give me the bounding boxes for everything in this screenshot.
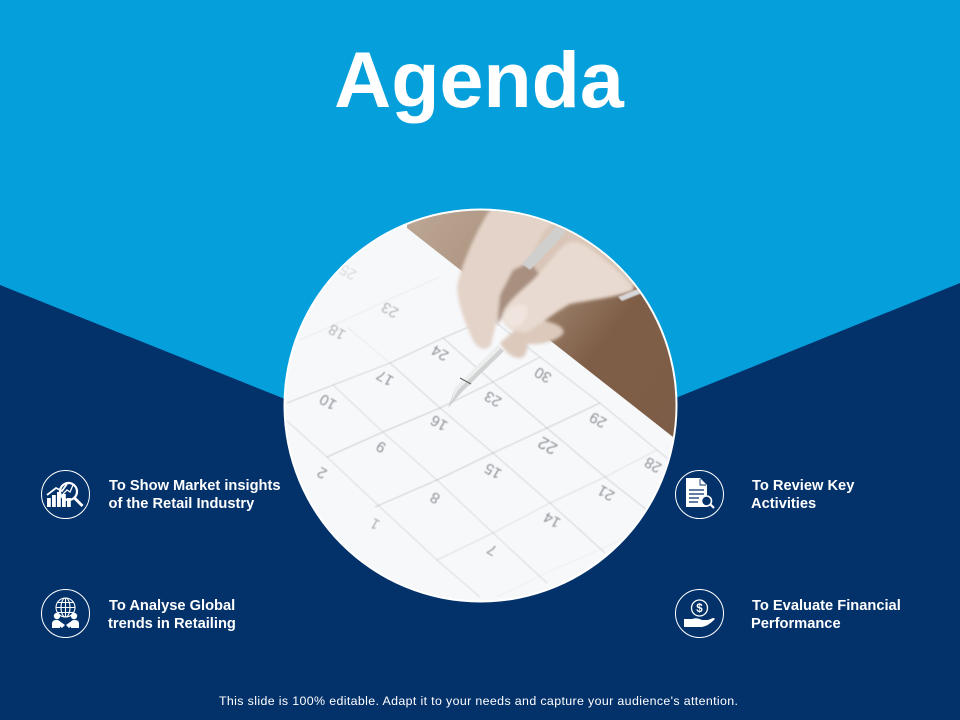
label: Performance: [751, 616, 841, 632]
thumbnail: [504, 305, 527, 327]
calendar numbers: 25: [337, 260, 360, 283]
thumb: [502, 242, 634, 332]
shadow between fingers: [497, 262, 540, 325]
footer note: This slide is 100% editable. Adapt it to your needs and capture your audience's attention.: [219, 694, 738, 708]
calendar numbers: 7: [484, 540, 500, 559]
icon: chart and magnifier: [42, 470, 90, 518]
calendar numbers: 29: [587, 408, 610, 431]
pen: [448, 226, 566, 408]
calendar numbers: 16: [428, 411, 451, 434]
icon: document and magnifier: [676, 470, 724, 518]
calendar numbers: 23: [379, 298, 402, 321]
calendar numbers: 28: [642, 453, 665, 476]
cuff: [618, 288, 642, 301]
calendar numbers: [314, 260, 665, 559]
wood desk: [407, 200, 690, 437]
circular calendar photo: [280, 200, 690, 610]
icon: hand with dollar coin: [676, 590, 724, 638]
calendar numbers: 9: [373, 437, 389, 456]
background: navy chevron: [0, 283, 960, 720]
calendar numbers: 15: [482, 459, 505, 482]
calendar numbers: 14: [541, 508, 564, 531]
item: financial performance: [676, 590, 901, 638]
label: To Review Key: [752, 478, 855, 494]
calendar grid lines: [286, 312, 668, 597]
label: Activities: [751, 496, 816, 512]
item: global trends: [42, 590, 236, 638]
calendar numbers: 24: [429, 341, 452, 364]
item: review activities: [676, 470, 855, 518]
index finger: [457, 205, 553, 349]
title: Agenda: [334, 35, 625, 124]
label: of the Retail Industry: [108, 496, 255, 512]
calendar numbers: 18: [326, 320, 349, 343]
calendar numbers: 17: [374, 366, 397, 389]
calendar numbers: 8: [427, 488, 443, 507]
calendar numbers: 22: [535, 433, 561, 458]
hand holding pen: [457, 205, 640, 358]
calendar numbers: 30: [532, 363, 555, 386]
calendar numbers: 23: [482, 387, 505, 410]
calendar numbers: 21: [595, 481, 618, 504]
back finger: [500, 320, 563, 358]
calendar numbers: 10: [317, 390, 340, 413]
label: trends in Retailing: [108, 616, 236, 632]
calendar numbers: 1: [367, 514, 383, 533]
back of hand: [531, 224, 636, 290]
label: To Analyse Global: [109, 598, 235, 614]
icon: globe and people: [42, 590, 90, 638]
icon: hand with dollar coin: $: [696, 603, 703, 615]
label: To Evaluate Financial: [752, 598, 901, 614]
item: market insights: [42, 470, 281, 518]
label: To Show Market insights: [109, 478, 281, 494]
calendar numbers: 2: [314, 463, 330, 482]
